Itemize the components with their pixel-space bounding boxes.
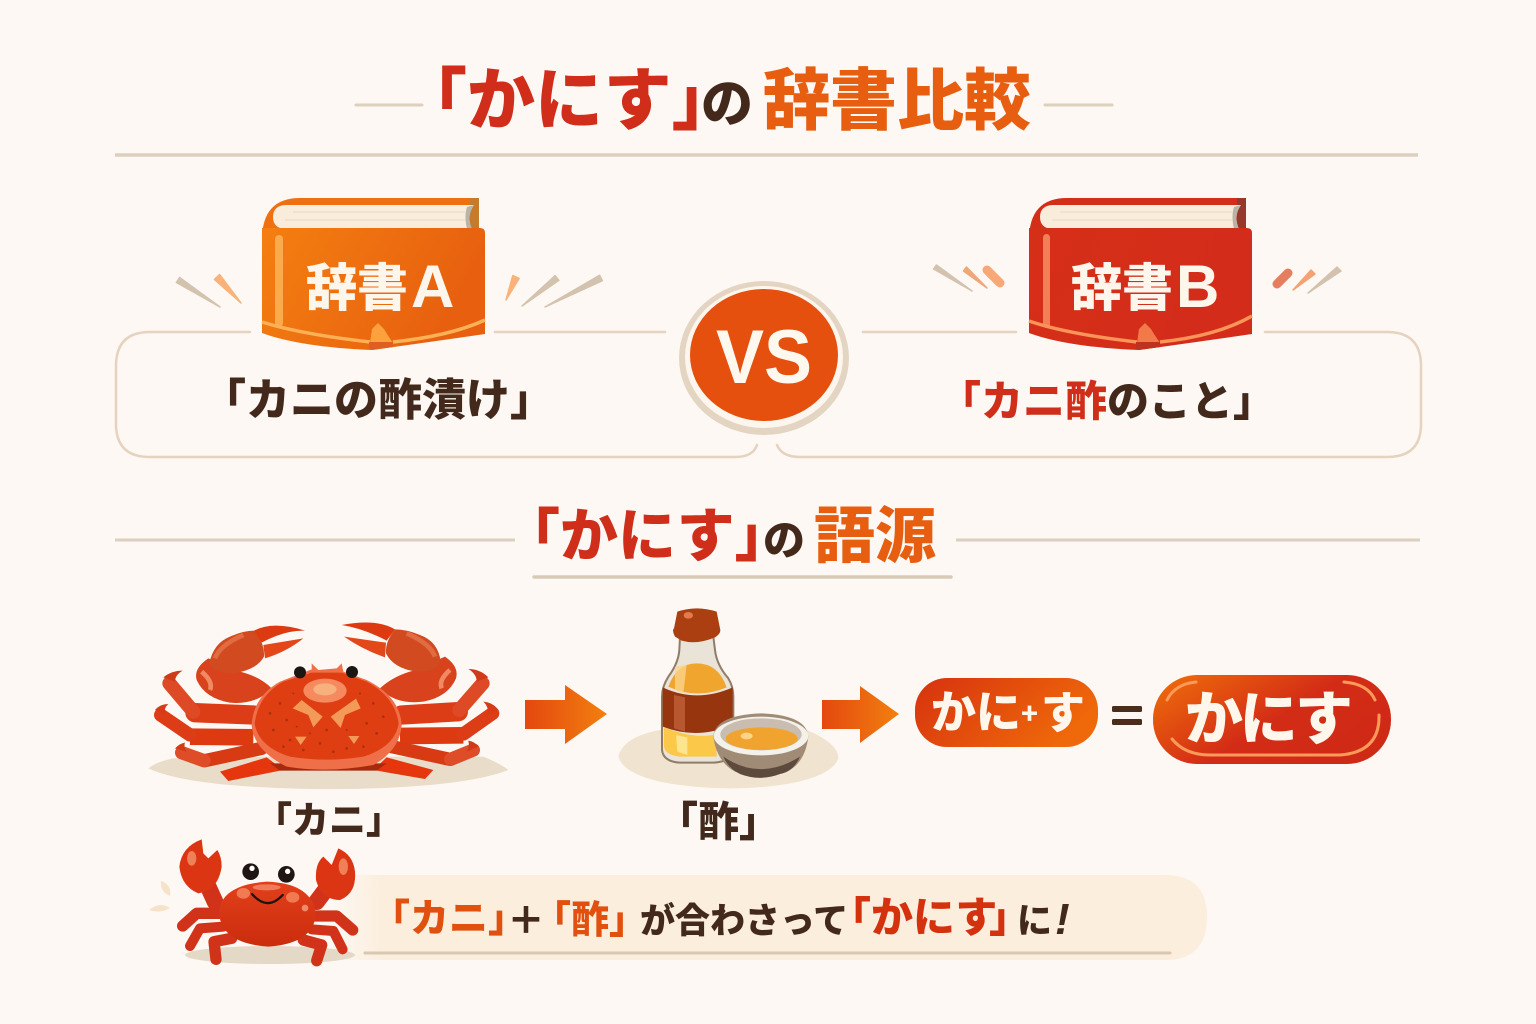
icon: book A xyxy=(262,198,485,350)
title: の xyxy=(701,62,753,137)
callout text: 「かにす xyxy=(829,884,997,945)
callout text: 「カニ」 xyxy=(371,888,527,944)
callout text: 「酢」 xyxy=(533,889,647,944)
pill: kani + su: かに xyxy=(931,676,1021,741)
callout text: 」 xyxy=(989,884,1031,945)
callout banner xyxy=(330,875,1207,960)
callout text: ＋ xyxy=(507,890,545,945)
crab claws xyxy=(196,622,457,703)
VS badge: VS xyxy=(716,315,812,400)
title: 辞書比較 xyxy=(763,47,1031,144)
title xyxy=(356,45,1112,144)
icon: cute crab xyxy=(179,839,355,964)
callout text: に xyxy=(1017,893,1052,944)
pill: kani + su: + xyxy=(1021,693,1038,733)
crab legs xyxy=(161,683,493,761)
definition A text: 「カニの酢漬け」 xyxy=(202,364,554,428)
definition B text: 「カニ酢のこと」 xyxy=(939,368,1275,429)
rays: book B xyxy=(934,265,1341,293)
carapace xyxy=(252,663,402,770)
sparks near small crab xyxy=(149,881,170,912)
book A label: 辞書 xyxy=(306,247,408,321)
pill: kanisu xyxy=(1153,672,1391,764)
equals sign xyxy=(1112,706,1142,725)
arrow 1 xyxy=(525,685,607,744)
section heading: etymology: 語源 xyxy=(814,486,936,575)
section heading: etymology: の xyxy=(763,507,805,568)
panel: dictionary A definition xyxy=(116,332,757,457)
label: vinegar: 「酢」 xyxy=(657,788,780,848)
book A label: A xyxy=(411,253,454,320)
panel: dictionary B definition xyxy=(777,332,1421,457)
pill: kani + su xyxy=(915,676,1098,747)
callout text: ! xyxy=(1055,895,1070,944)
book B label: B xyxy=(1176,253,1219,320)
title: 「かにす」 xyxy=(399,45,740,144)
section heading: etymology: 「かにす」 xyxy=(502,489,793,573)
VS badge xyxy=(679,281,849,435)
book B label: 辞書 xyxy=(1071,247,1173,321)
callout text: が合わさって xyxy=(640,893,848,944)
callout text xyxy=(371,884,1070,945)
section heading: etymology xyxy=(115,486,1420,577)
rays: book A xyxy=(176,275,602,307)
carapace speckles xyxy=(269,692,385,753)
icon: realistic crab xyxy=(148,622,508,789)
crab underside xyxy=(270,763,387,771)
pill: kani + su: す xyxy=(1041,677,1085,741)
pill: kanisu: かにす xyxy=(1185,672,1353,756)
icon: book B xyxy=(1029,198,1252,350)
arrow 2 xyxy=(822,686,899,743)
label: crab: 「カニ」 xyxy=(255,790,403,844)
icon: vinegar bottle and dish xyxy=(618,608,838,788)
cute crab legs and arms xyxy=(183,883,353,961)
